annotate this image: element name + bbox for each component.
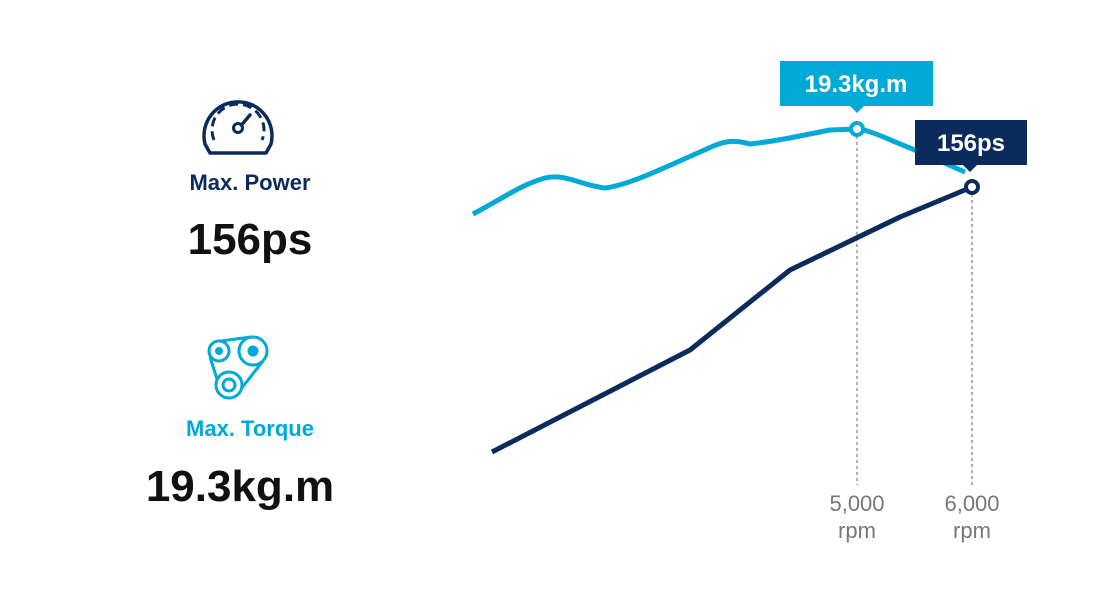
value: 19.3kg.m: 19.3kg.m — [146, 462, 334, 511]
chart: torque and power curves: 6,000 — [944, 491, 1000, 516]
chart: torque and power curves: 19.3kg.m — [805, 71, 907, 98]
chart: torque and power curves: rpm — [953, 518, 991, 543]
chart: torque and power curves: 156ps — [937, 130, 1005, 157]
chart: torque and power curves: 5,000 — [829, 491, 885, 516]
icon: speedometer — [202, 100, 274, 155]
chart: torque and power curves: rpm — [838, 518, 876, 543]
label: max torque: Max. Torque — [186, 416, 314, 441]
label: max power: Max. Power — [189, 170, 311, 195]
icon: belt pulleys — [208, 336, 268, 400]
value: 156ps: 156ps — [188, 215, 312, 264]
